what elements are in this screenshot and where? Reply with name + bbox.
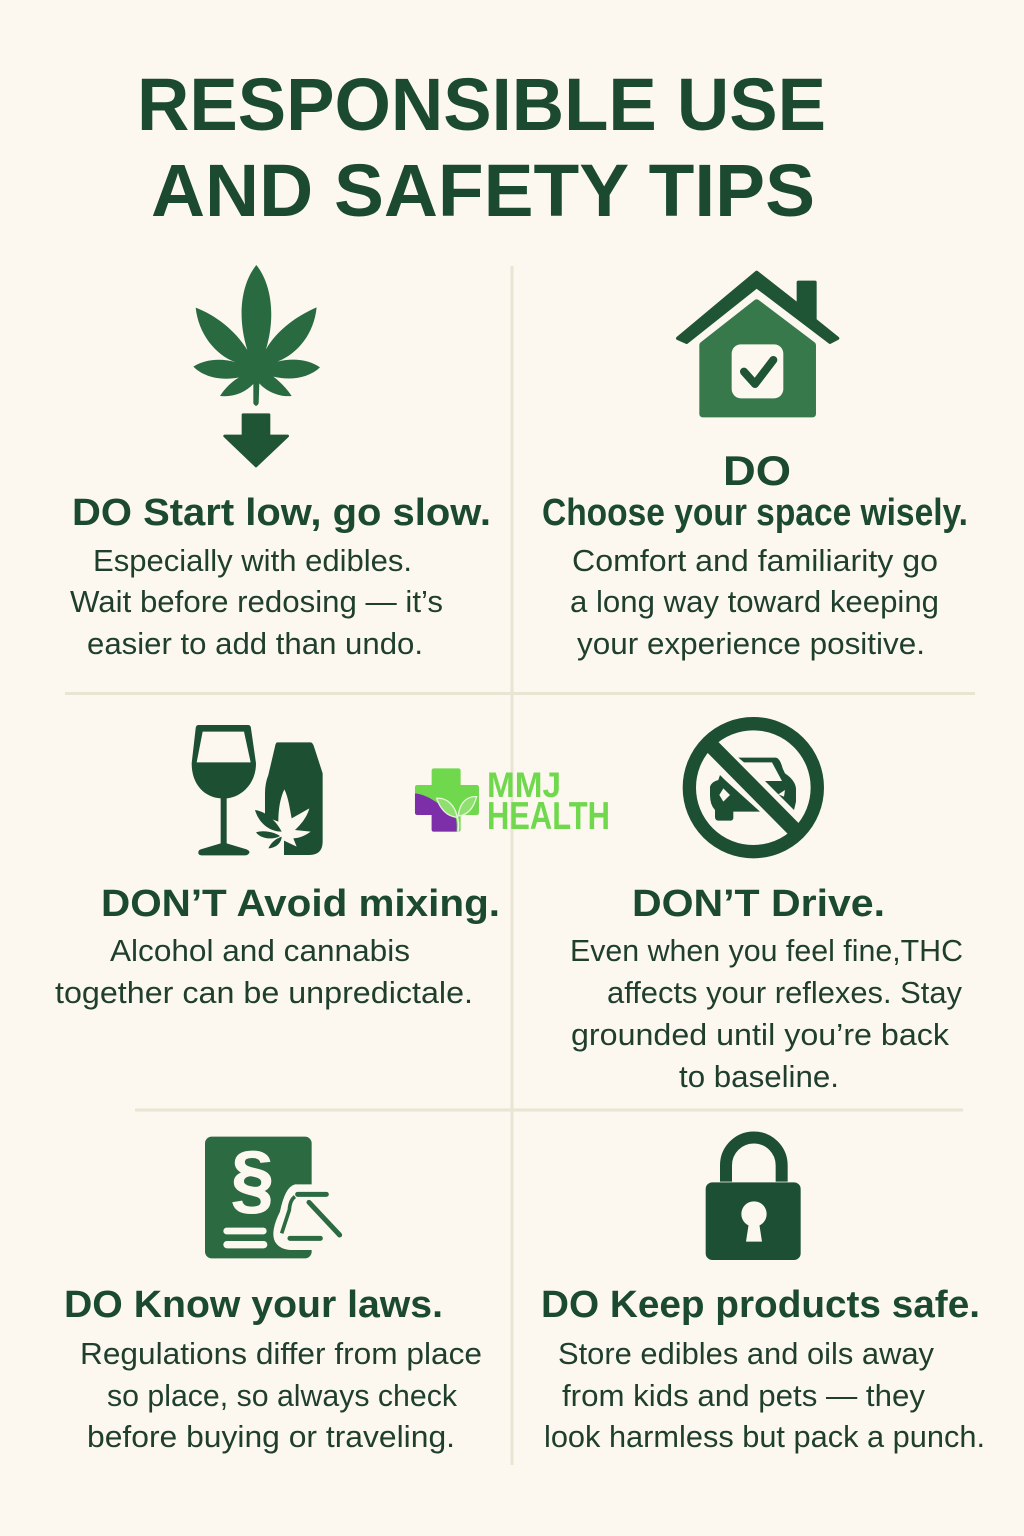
body text: to baseline.	[679, 1059, 839, 1094]
heading: DON’T Avoid mixing.	[101, 883, 500, 925]
body text: Alcohol and cannabis	[110, 933, 410, 968]
panel: choose your space	[542, 272, 968, 661]
body text	[55, 933, 473, 1010]
panel: keep products safe	[541, 1137, 985, 1454]
panel: know your laws	[64, 1136, 482, 1454]
heading	[542, 447, 968, 534]
panel: start low, go slow	[70, 265, 491, 661]
body text	[544, 1336, 985, 1454]
heading: DON’T Drive.	[632, 883, 885, 925]
icon: house with check	[678, 272, 838, 414]
heading: DO	[723, 447, 791, 494]
body text	[70, 543, 443, 661]
panel: avoid mixing	[55, 725, 500, 1010]
icon: padlock	[706, 1137, 801, 1260]
heading: DO Start low, go slow.	[72, 492, 491, 534]
body text: from kids and pets — they	[562, 1378, 925, 1413]
icon: legal document with scale	[205, 1136, 340, 1258]
icon: wine glass and cannabis bottle	[192, 725, 323, 855]
icon: legal document with scale: §	[231, 1136, 274, 1222]
body text: together can be unpredictale.	[55, 975, 473, 1010]
body text	[80, 1336, 482, 1454]
body text	[570, 543, 939, 661]
logo: MMJ Health: MMJ	[487, 766, 561, 805]
body text: easier to add than undo.	[87, 626, 423, 661]
body text: Comfort and familiarity go	[572, 543, 938, 578]
body text: Wait before redosing — it’s	[70, 584, 443, 619]
body text: Store edibles and oils away	[558, 1336, 934, 1371]
icon: no driving sign	[689, 724, 817, 852]
panel: don't drive	[570, 724, 963, 1094]
title: RESPONSIBLE USE	[137, 63, 826, 146]
body text: affects your reflexes. Stay	[607, 975, 962, 1010]
heading: DO Keep products safe.	[541, 1284, 980, 1326]
body text: so place, so always check	[107, 1378, 457, 1413]
body text	[570, 933, 963, 1094]
body text: your experience positive.	[577, 626, 925, 661]
logo: MMJ Health	[415, 766, 610, 838]
body text: Regulations differ from place	[80, 1336, 482, 1371]
body text: Especially with edibles.	[93, 543, 412, 578]
body text: before buying or traveling.	[87, 1419, 455, 1454]
body text: Even when you feel fine,THC	[570, 933, 963, 968]
body text: look harmless but pack a punch.	[544, 1419, 985, 1454]
title: AND SAFETY TIPS	[151, 149, 815, 232]
icon: cannabis leaf with down arrow	[193, 265, 320, 466]
logo: MMJ Health: HEALTH	[487, 795, 610, 838]
title	[137, 63, 826, 232]
body text: a long way toward keeping	[570, 584, 939, 619]
body text: grounded until you’re back	[571, 1017, 950, 1052]
heading: Choose your space wisely.	[542, 492, 968, 534]
heading: DO Know your laws.	[64, 1284, 443, 1326]
